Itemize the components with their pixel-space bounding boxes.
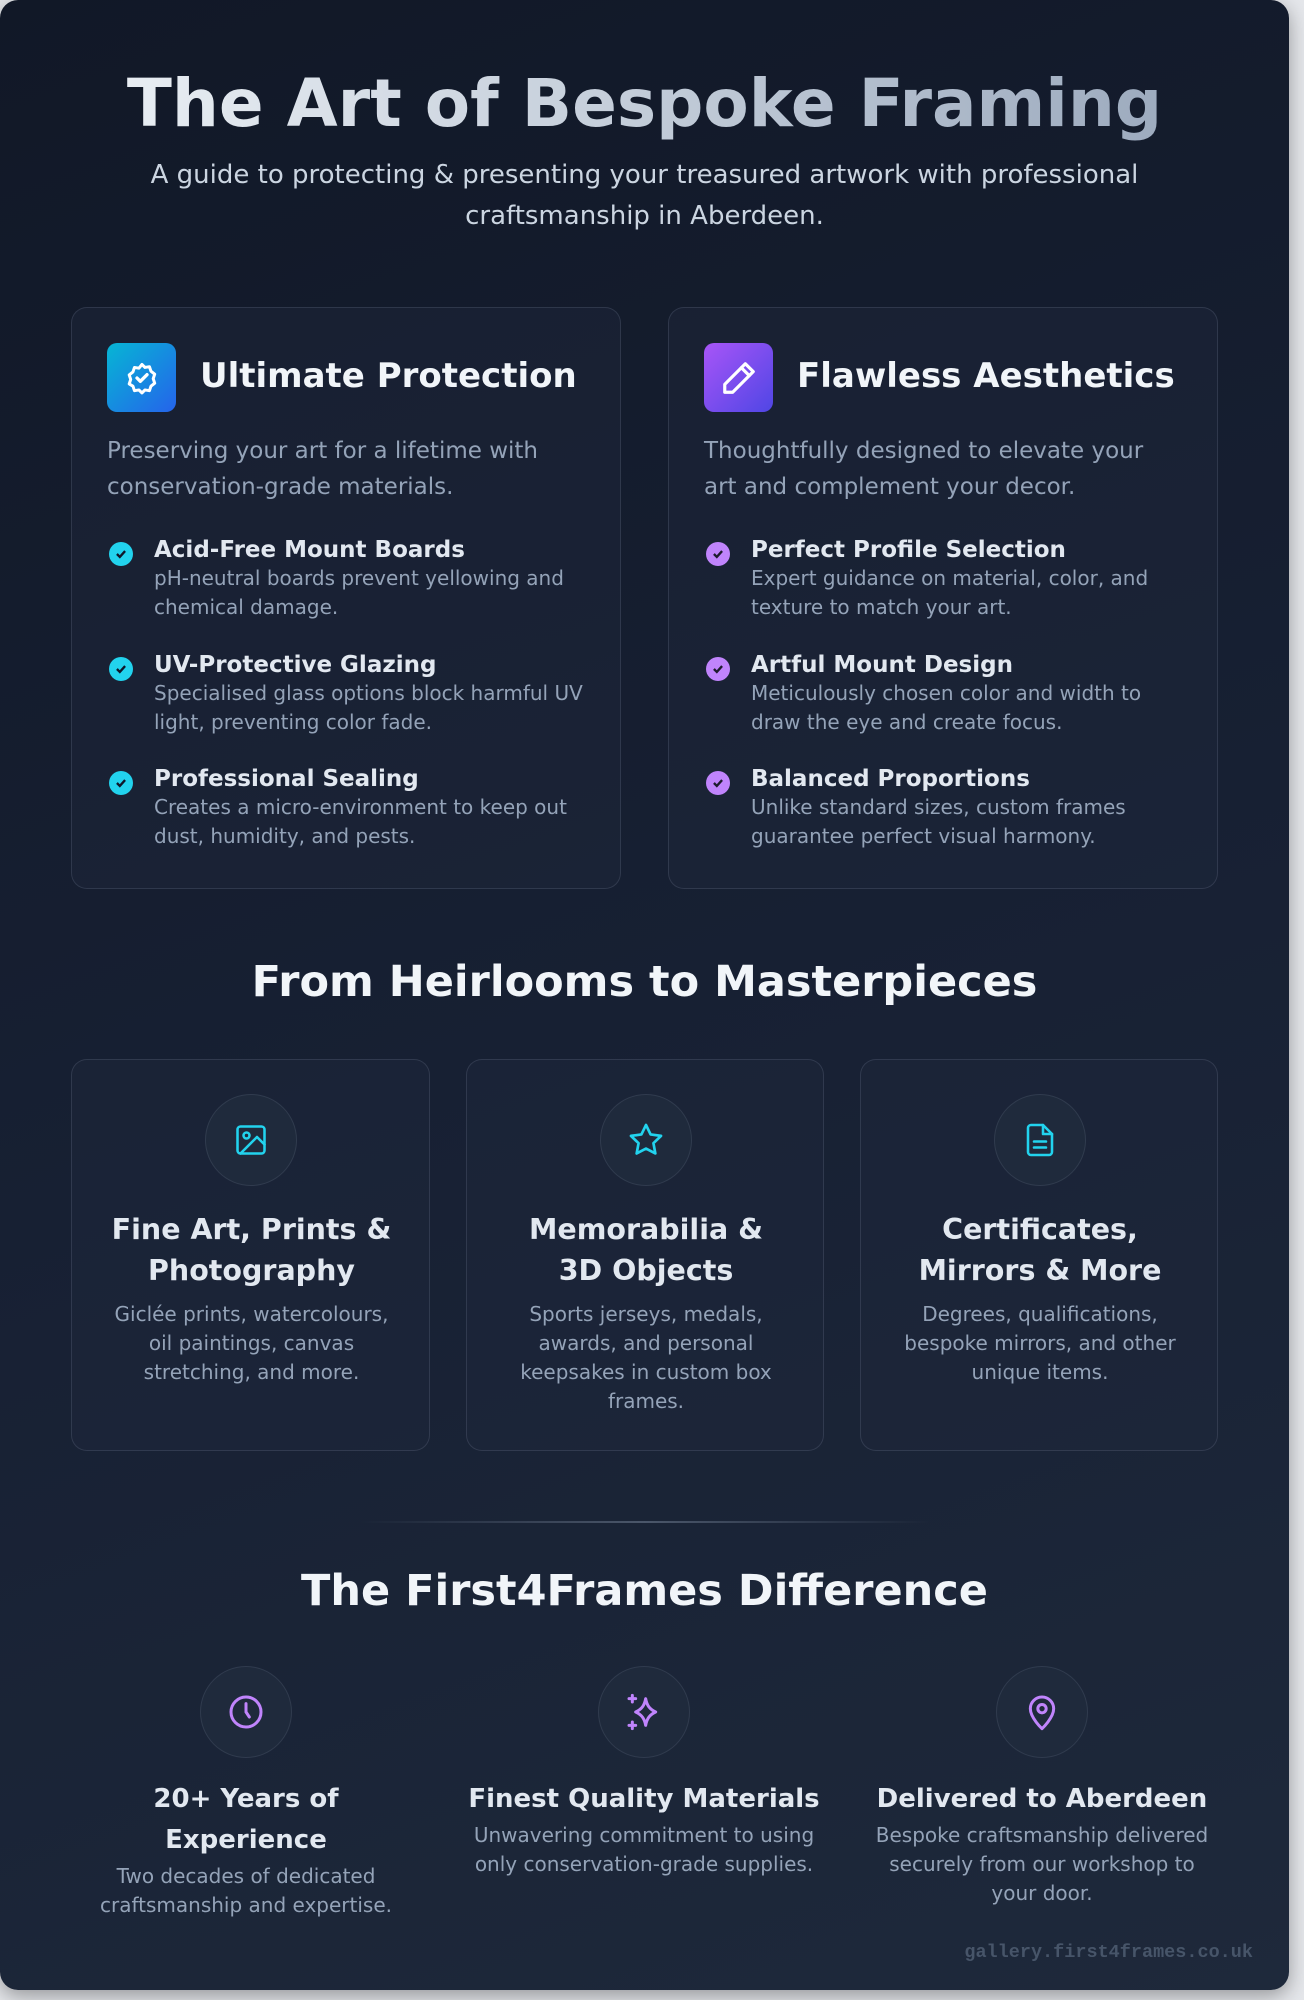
title: Delivered to Aberdeen [877,1784,1207,1814]
title: Certificates, [942,1213,1138,1246]
title: Finest Quality Materials [468,1784,820,1814]
card: fine art [71,1059,430,1451]
bullet: profile [706,537,1148,619]
bullet: uv glazing: UV-Protective Glazing [154,652,436,678]
title: 20+ Years of [153,1784,339,1814]
panel: ultimate protection [71,307,621,889]
heading: Flawless Aesthetics [797,356,1175,396]
bullet: sealing: Professional Sealing [154,766,419,792]
feature: materials [468,1666,820,1876]
title: Mirrors & More [919,1254,1161,1287]
bullet: sealing [109,766,567,848]
title [153,1784,339,1855]
bullet: proportions: Unlike standard sizes, custom frames guarantee perfect visual harmony. [751,795,1126,848]
title: The Art of Bespoke Framing [127,65,1162,142]
heading: heirlooms: From Heirlooms to Masterpieces [252,957,1037,1007]
description: Two decades of dedicated craftsmanship and expertise. [100,1864,392,1917]
heading: difference: The First4Frames Difference [301,1566,988,1616]
title: Memorabilia & [529,1213,763,1246]
footer url: gallery.first4frames.co.uk [964,1942,1253,1963]
description: Sports jerseys, medals, awards, and personal keepsakes in custom box frames. [520,1302,772,1413]
bullet: sealing: Creates a micro-environment to keep out dust, humidity, and pests. [154,795,567,848]
description: Bespoke craftsmanship delivered securely from our workshop to your door. [876,1823,1208,1905]
title: 3D Objects [559,1254,733,1287]
bullet: profile: Expert guidance on material, color, and texture to match your art. [751,566,1148,619]
feature: experience [100,1666,392,1917]
title [919,1213,1161,1287]
description: Degrees, qualifications, bespoke mirrors, and other unique items. [904,1302,1176,1384]
title [529,1213,763,1287]
card: certificates [860,1059,1218,1451]
card: memorabilia [466,1059,824,1451]
bullet: acid-free [109,537,564,619]
subtitle: A guide to protecting & presenting your treasured artwork with professional craftsmanship in Aberdeen. [151,160,1138,231]
bullet: acid-free: Acid-Free Mount Boards [154,537,465,563]
feature: delivery [876,1666,1208,1905]
icon: location pin [996,1666,1088,1758]
bullet: proportions: Balanced Proportions [751,766,1030,792]
title: Fine Art, Prints & Photography [112,1213,391,1287]
heading: Ultimate Protection [200,356,577,396]
bullet: acid-free: pH-neutral boards prevent yellowing and chemical damage. [154,566,564,619]
icon: clock [200,1666,292,1758]
description: Unwavering commitment to using only conservation-grade supplies. [474,1823,814,1876]
description: Preserving your art for a lifetime with conservation-grade materials. [107,438,538,500]
icon: star [600,1094,692,1186]
bullet: uv glazing [109,652,583,734]
icon: pencil [704,343,773,412]
icon: shield [107,343,176,412]
bullet: proportions [706,766,1126,848]
bullet: uv glazing: Specialised glass options block harmful UV light, preventing color fade. [154,681,583,734]
description: Thoughtfully designed to elevate your art and complement your decor. [704,438,1143,500]
description: Giclée prints, watercolours, oil paintings, canvas stretching, and more. [115,1302,388,1384]
bullet: mount design: Artful Mount Design [751,652,1013,678]
icon: document [994,1094,1086,1186]
bullet: mount design [706,652,1141,734]
bullet: mount design: Meticulously chosen color and width to draw the eye and create focus. [751,681,1141,734]
bullet: profile: Perfect Profile Selection [751,537,1066,563]
panel: flawless aesthetics [668,307,1218,889]
title: Experience [165,1825,327,1855]
icon: sparkles [598,1666,690,1758]
icon: image [205,1094,297,1186]
